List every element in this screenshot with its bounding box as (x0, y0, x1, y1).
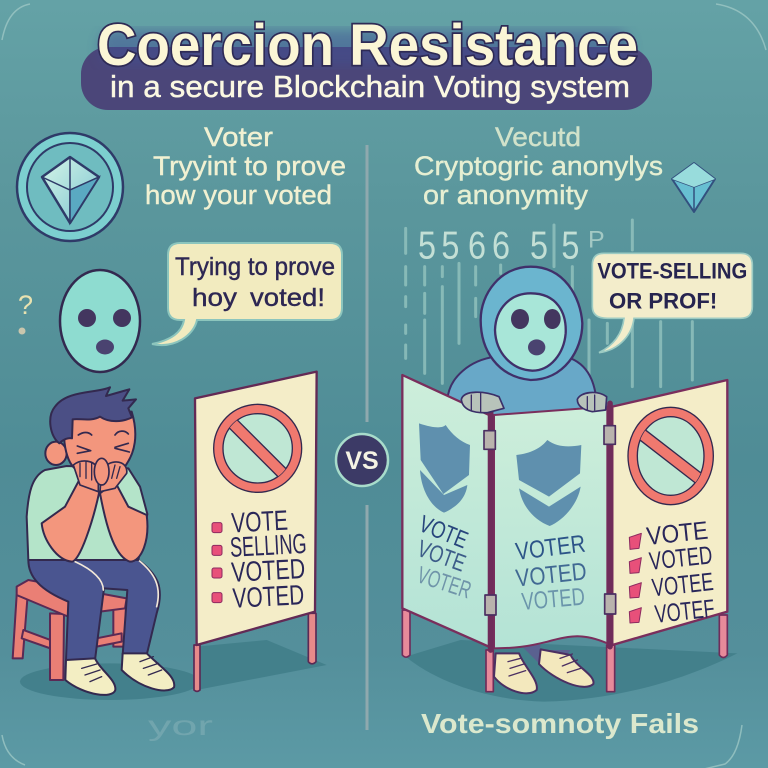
left column heading: Voter (204, 122, 273, 152)
rain digits: 6 (468, 223, 486, 267)
heading: Coercion Resistance (97, 13, 638, 78)
title shadow (100, 30, 630, 66)
sign legs (194, 613, 316, 691)
body (447, 357, 597, 423)
checklist: VOTED (230, 553, 306, 588)
rain lines (406, 220, 692, 387)
right panel (612, 380, 727, 645)
right column heading: Cryptogric anonylys (414, 151, 663, 181)
caption right: Vote-somnoty Fails (421, 708, 699, 739)
left panel text: VOTER (414, 562, 474, 604)
speech bubble left (152, 243, 342, 345)
speech bubble right (592, 253, 752, 353)
check boxes (629, 533, 641, 623)
checklist: VOTEE (651, 568, 715, 602)
rain digits: 5 (530, 223, 548, 267)
face (64, 412, 135, 472)
icon: small gem (672, 163, 715, 212)
VS badge: VS (345, 447, 379, 475)
center panel text: VOTER (514, 531, 587, 566)
rain digits: 5 (418, 223, 436, 267)
eyes (77, 431, 129, 453)
booth shadow (406, 640, 737, 702)
clips (484, 426, 616, 615)
checklist: VOTEF (653, 595, 716, 629)
title banner (81, 13, 652, 110)
subtitle: in a secure Blockchain Voting system (110, 69, 630, 104)
ear (45, 442, 67, 465)
left column heading: Tryyint to prove (153, 151, 346, 181)
hands (73, 458, 127, 492)
checklist: VOTE (231, 505, 289, 538)
shoes (65, 653, 174, 695)
sign board (195, 372, 317, 645)
rain digits: 5 (561, 223, 579, 267)
right column heading: or anonymity (423, 180, 589, 210)
hood (481, 267, 582, 380)
right column heading: Vecutd (495, 122, 581, 152)
shoes (494, 645, 594, 693)
left column heading (145, 122, 346, 210)
hair (50, 387, 136, 443)
trousers (28, 560, 160, 660)
shield left (419, 423, 470, 513)
center panel (494, 407, 607, 648)
checklist: SELLING (229, 528, 307, 563)
check boxes (212, 523, 222, 603)
rain digits: P (588, 226, 605, 253)
face (495, 293, 566, 371)
center panel text: VOTED (514, 558, 588, 593)
rain digits: 6 (492, 223, 510, 267)
voting booth (402, 375, 737, 702)
speech bubble left: Trying to prove (175, 253, 335, 281)
left panel text: VOTE (414, 535, 469, 578)
binary rain (406, 220, 692, 387)
center divider (366, 145, 368, 730)
stool (13, 580, 127, 680)
center panel text: VOTED (521, 584, 586, 616)
checklist (228, 504, 310, 614)
center panel text (514, 531, 588, 616)
question mark: ? (18, 290, 33, 320)
icon: gem badge (17, 133, 123, 241)
masked face left (60, 270, 140, 372)
gloved hands (461, 392, 607, 413)
right arm (100, 482, 147, 562)
left panel text: VOTE (415, 511, 472, 554)
checklist: VOTE (645, 517, 709, 551)
speech bubble right: VOTE-SELLING (597, 258, 747, 283)
sign shadow (197, 640, 327, 690)
speech bubble left: voted! (250, 284, 325, 312)
speech bubble left: hoy (192, 284, 238, 312)
poles (491, 403, 610, 650)
checklist: VOTED (232, 579, 305, 614)
rain digits: 5 (441, 223, 459, 267)
rain digits (418, 223, 605, 267)
left panel text (414, 511, 474, 604)
prohibition symbol (628, 407, 713, 505)
legs (402, 610, 727, 692)
question mark (18, 290, 33, 334)
faded caption left: yor (148, 710, 213, 741)
left panel (402, 375, 489, 647)
prohibition symbol (214, 404, 302, 492)
checklist: VOTED (648, 541, 714, 576)
floor scene left (13, 372, 327, 700)
shield center (516, 440, 581, 526)
right column heading (414, 122, 663, 210)
floor shadow (20, 663, 200, 700)
left column heading: how your voted (145, 180, 332, 210)
hooded figure (447, 267, 597, 423)
speech bubble right: OR PROF! (609, 288, 717, 313)
VS badge (336, 434, 388, 486)
banner pill (81, 47, 652, 110)
shirt (27, 466, 147, 560)
left arm (42, 482, 99, 562)
checklist (645, 516, 719, 629)
